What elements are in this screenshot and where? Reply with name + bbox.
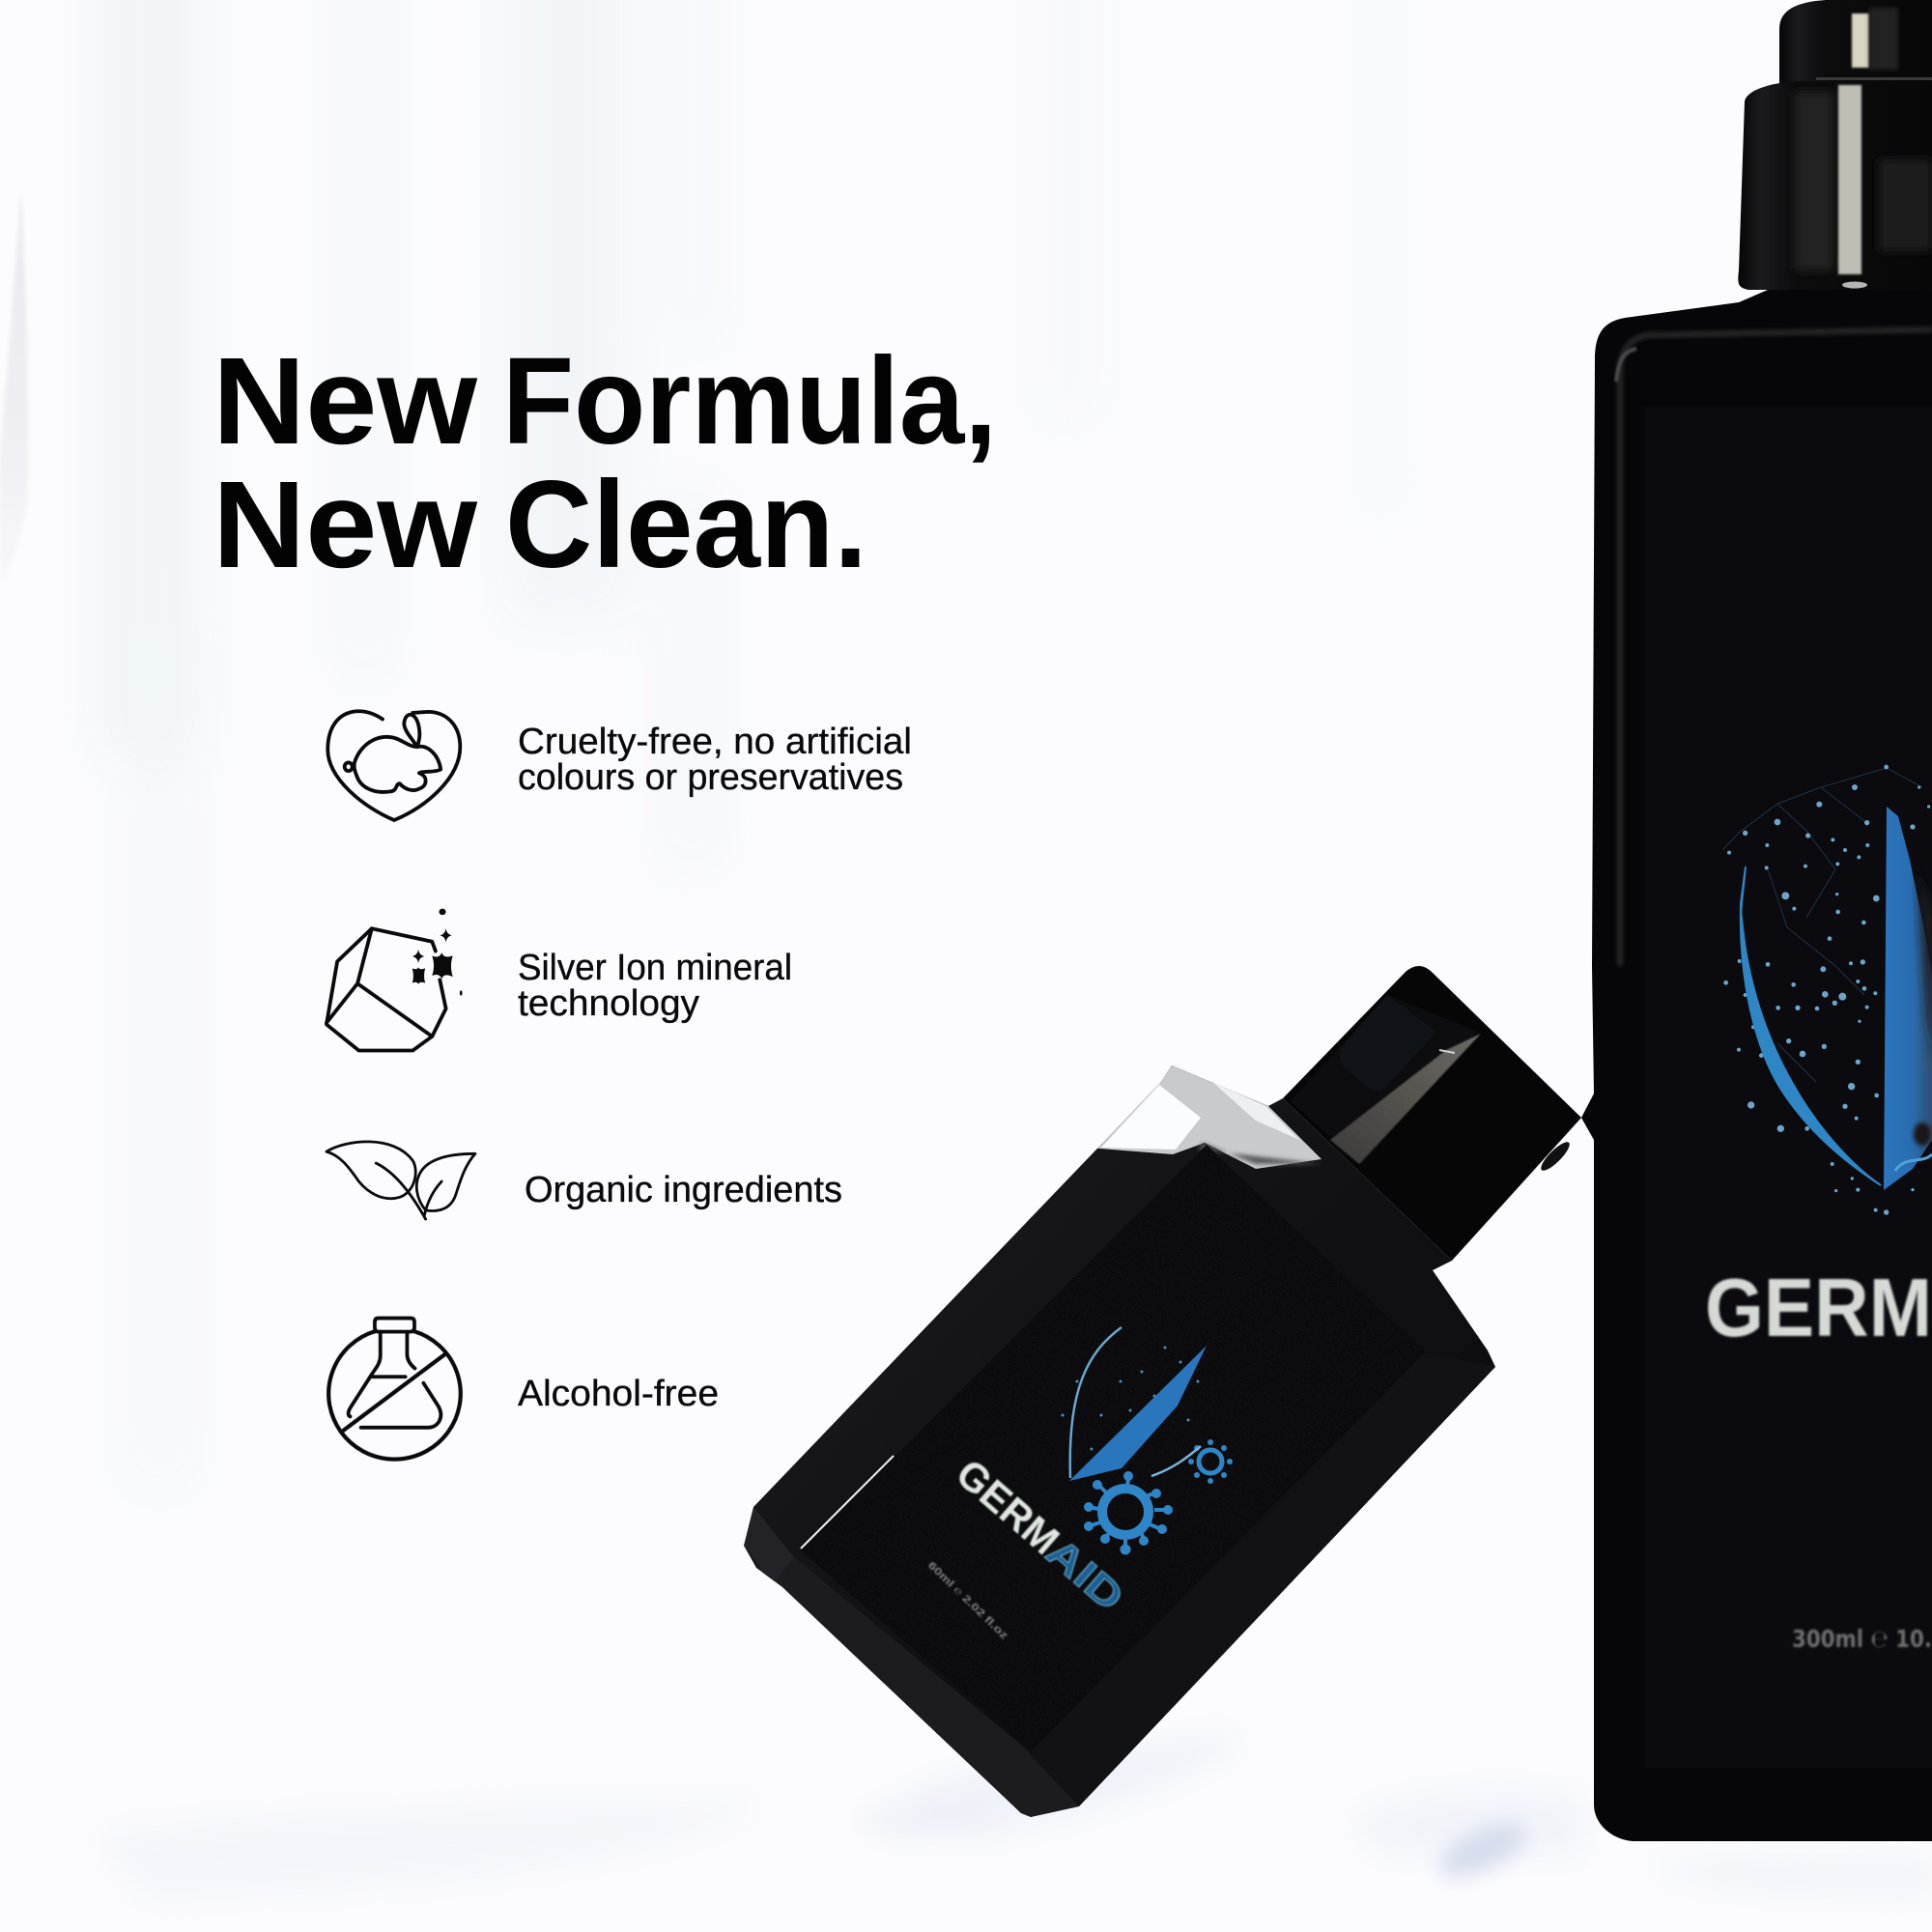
- small bottle: brand name: [948, 1450, 1133, 1620]
- shield: wedge shading: [1918, 869, 1932, 1063]
- large bottle: lower cap: [1738, 81, 1932, 290]
- text: silver ion: technology: [518, 983, 699, 1024]
- small bottle: cap: [1283, 966, 1581, 1261]
- logo: scattered dots: [1061, 1347, 1200, 1451]
- icon: mineral rock with sparkles: [327, 909, 463, 1051]
- feature: organic: [327, 1142, 842, 1219]
- small bottle: volume text: 60ml ℮ 2.02 fl.oz: [925, 1560, 1010, 1642]
- title: Clean.: [505, 456, 867, 594]
- small bottle: base facets: [744, 1352, 1495, 1817]
- small bottle: logo: [1061, 1327, 1233, 1555]
- large bottle: body: [1581, 290, 1932, 1841]
- text: cruelty-free: colours or preservatives: [518, 757, 903, 798]
- large bottle: upper cap: [1779, 0, 1932, 89]
- small bottle: label: [801, 1145, 1425, 1751]
- large bottle: edge highlights: [1616, 329, 1932, 1787]
- title: New: [213, 332, 477, 470]
- title: [213, 332, 997, 594]
- small bottle: clear glass shoulder: [1088, 1065, 1323, 1169]
- logo: large virus: [1084, 1471, 1173, 1555]
- logo: wedge: [1069, 1346, 1207, 1481]
- shield: dots: [1723, 765, 1930, 1215]
- text: cruelty-free: [518, 722, 912, 798]
- title: New: [213, 456, 477, 594]
- icon: crossed flask: [328, 1318, 461, 1460]
- shield: curved left edge: [1741, 867, 1881, 1185]
- title: Formula,: [502, 332, 997, 470]
- feature: silver ion: [327, 909, 792, 1051]
- text: alcohol-free: Alcohol-free: [518, 1374, 719, 1414]
- text: silver ion: Silver Ion mineral: [518, 948, 792, 988]
- feature: cruelty-free: [327, 711, 912, 820]
- large bottle: label: [1645, 407, 1932, 1768]
- feature: alcohol-free: [328, 1318, 719, 1460]
- large bottle: [1581, 0, 1932, 1841]
- shield: constellation lines: [1722, 768, 1922, 1082]
- large bottle: shield logo: [1722, 765, 1932, 1215]
- icon: rabbit in heart: [327, 711, 460, 820]
- small bottle: brand name: AID: [1037, 1528, 1133, 1620]
- logo: arc: [1070, 1327, 1122, 1478]
- text: cruelty-free: Cruelty-free, no artificial: [518, 722, 912, 762]
- text: silver ion: [518, 948, 792, 1024]
- text: organic: Organic ingredients: [525, 1170, 842, 1210]
- icon: leaves: [327, 1142, 475, 1219]
- small tilted bottle: [744, 966, 1581, 1817]
- logo: small virus: [1188, 1439, 1233, 1484]
- shield: blue wedge: [1884, 807, 1932, 1190]
- small bottle: brand name: GERM: [948, 1450, 1068, 1563]
- small bottle: body: [744, 1065, 1495, 1817]
- logo: connector: [1151, 1446, 1201, 1476]
